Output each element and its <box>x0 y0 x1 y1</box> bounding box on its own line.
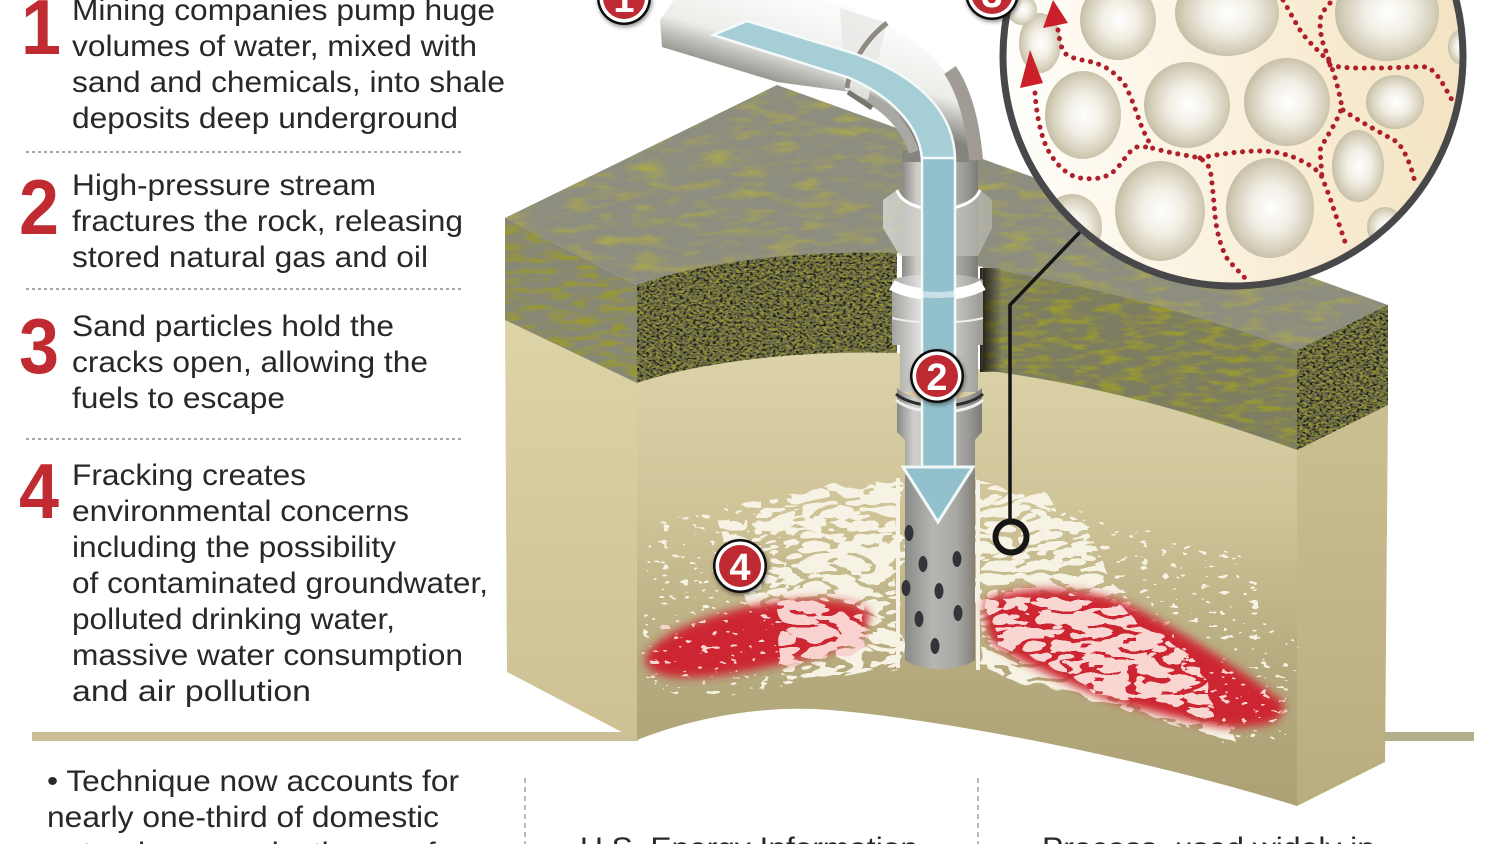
step 4 text: of contaminated groundwater, <box>72 567 488 600</box>
contamination, left <box>645 600 869 678</box>
fact: share of production: • Technique now accounts for <box>47 765 459 798</box>
ground cross-section block <box>505 85 1388 806</box>
sand grains <box>1007 0 1472 261</box>
step 4 text: polluted drinking water, <box>72 603 395 636</box>
vertical casing <box>883 150 992 475</box>
water flow with arrow <box>713 21 983 522</box>
badge 4: 4 <box>729 547 751 589</box>
step 4 text: 4 <box>19 447 59 535</box>
step 4 text <box>19 447 488 708</box>
badge 2 <box>910 349 964 403</box>
step 4 text: Fracking creates <box>72 459 306 492</box>
contamination, right <box>984 589 1285 727</box>
fractured rock, right <box>976 480 1300 745</box>
step 4 text: including the possibility <box>72 531 396 564</box>
dotted gas paths <box>1035 0 1452 278</box>
step 3 text: 3 <box>19 302 59 390</box>
step 1 text: deposits deep underground <box>72 102 458 135</box>
red flow arrowheads <box>1020 0 1068 88</box>
lower perforated tube <box>902 470 975 669</box>
fact: share of production: nearly one-third of domestic <box>47 801 439 834</box>
magnifier: sand particles <box>1003 0 1472 286</box>
step 2 text: 2 <box>19 163 59 251</box>
badge 4 <box>713 539 767 593</box>
step 3 text: fuels to escape <box>72 382 285 415</box>
step 2 text: stored natural gas and oil <box>72 241 428 274</box>
badge 2: 2 <box>926 357 948 399</box>
step 3 text: cracks open, allowing the <box>72 346 428 379</box>
step 1 text: sand and chemicals, into shale <box>72 66 505 99</box>
well pipe <box>660 0 992 669</box>
step 4 text: environmental concerns <box>72 495 409 528</box>
ground line <box>32 732 1474 741</box>
badge 3 <box>965 0 1019 20</box>
step 3 text: Sand particles hold the <box>72 310 394 343</box>
step 4 text: massive water consumption <box>72 639 463 672</box>
step 3 text <box>19 302 428 415</box>
step 2 text <box>19 163 463 274</box>
step 2 text: High-pressure stream <box>72 169 376 202</box>
angled supply pipe and elbow <box>660 0 978 162</box>
leader line to magnifier <box>996 232 1080 552</box>
step 4 text: and air pollution <box>72 675 311 708</box>
sand faces <box>505 320 1388 806</box>
step 2 text: fractures the rock, releasing <box>72 205 463 238</box>
step 1 text: volumes of water, mixed with <box>72 30 477 63</box>
upper rock band <box>505 218 1388 450</box>
badge 1 <box>597 0 651 25</box>
step 1 text <box>21 0 505 135</box>
step list <box>19 0 505 708</box>
fact: share of production <box>47 765 491 844</box>
top surface <box>505 85 1388 350</box>
fractured rock, left <box>640 478 900 700</box>
